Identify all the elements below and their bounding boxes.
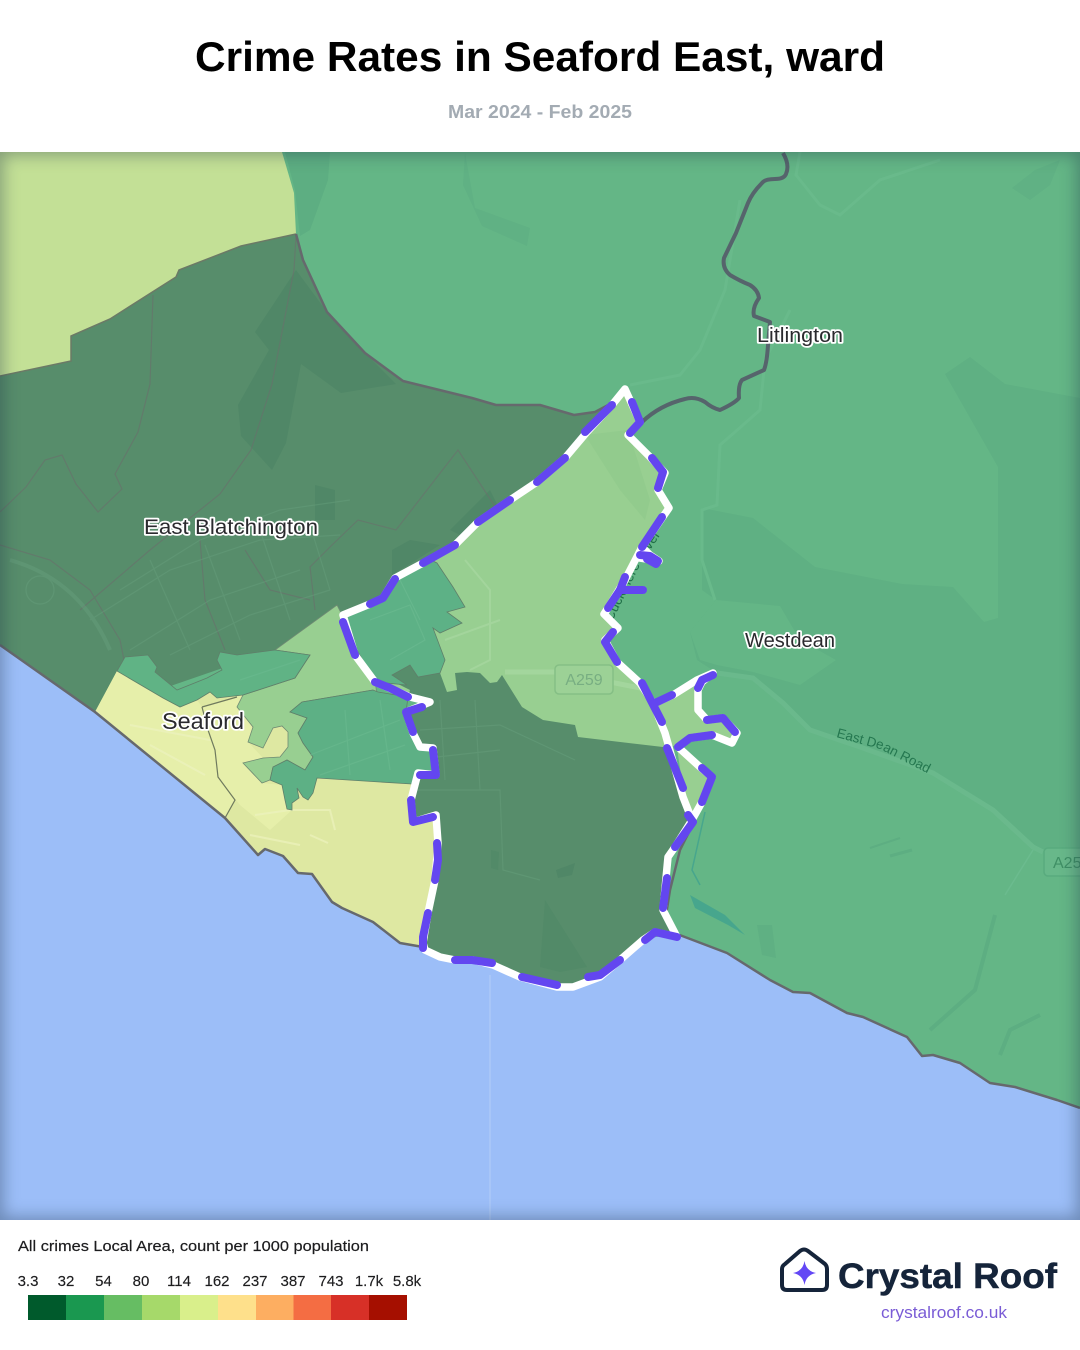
legend values: 387	[280, 1273, 306, 1290]
map panel	[0, 152, 1080, 1220]
legend values: 114	[167, 1273, 191, 1290]
legend values: 743	[318, 1273, 344, 1290]
label: East Dean Road: East Dean Road	[837, 728, 932, 773]
parish lines and streets	[0, 236, 496, 690]
legend colour scale	[28, 1295, 407, 1320]
label on river: Cuckmere River: Cuckmere River	[612, 534, 660, 618]
coastline and boundary lines	[0, 234, 1080, 1108]
label: road A259: A259	[565, 672, 603, 689]
legend values: 80	[133, 1273, 149, 1290]
ward area: light green north	[390, 396, 664, 747]
legend values: 1.7k	[355, 1273, 384, 1290]
logo url: crystalroof.co.uk	[881, 1304, 1008, 1322]
area: mid green south centre	[270, 690, 412, 810]
icon: house with star	[782, 1250, 827, 1290]
place label: East Blatchington: East Blatchington	[144, 516, 318, 539]
place label: Westdean: Westdean	[745, 630, 835, 652]
sea	[0, 646, 1080, 1220]
title: Crime Rates in Seaford East, ward	[195, 33, 885, 80]
area: Seaford yellow	[95, 671, 438, 947]
place label: Seaford: Seaford	[162, 708, 244, 734]
river Cuckmere	[642, 153, 787, 422]
legend values: 5.8k	[393, 1273, 422, 1290]
area: light green west of ward	[237, 605, 377, 783]
ward boundary: purple dashes	[343, 402, 735, 985]
area: East Blatchington dark green	[0, 234, 625, 712]
logo	[782, 1250, 1057, 1322]
river and paths	[796, 152, 940, 215]
area: top-left pale green	[0, 152, 296, 376]
place label: Litlington: Litlington	[757, 325, 843, 347]
legend title: All crimes Local Area, count per 1000 population	[18, 1238, 369, 1255]
area: pockets inside ward spurs	[658, 686, 732, 811]
legend values	[18, 1273, 422, 1290]
legend values: 32	[58, 1273, 74, 1290]
legend values: 162	[204, 1273, 230, 1290]
legend	[18, 1273, 422, 1320]
subtitle: date range: Mar 2024 - Feb 2025	[448, 102, 632, 122]
area: eastern and northern green land	[172, 152, 1080, 1107]
legend values: 54	[95, 1273, 112, 1290]
ward area: mid green	[340, 555, 465, 685]
label: road A25	[1044, 848, 1080, 876]
logo wordmark: Crystal Roof	[838, 1257, 1057, 1296]
ward: Seaford East areas	[348, 396, 687, 984]
ward boundary: white base line	[343, 389, 737, 987]
legend values: 237	[242, 1273, 268, 1290]
legend values: 3.3	[18, 1273, 38, 1290]
area: mid green north strip	[117, 650, 310, 707]
ward area: dark green south	[393, 666, 687, 984]
label: road A259	[555, 665, 613, 694]
